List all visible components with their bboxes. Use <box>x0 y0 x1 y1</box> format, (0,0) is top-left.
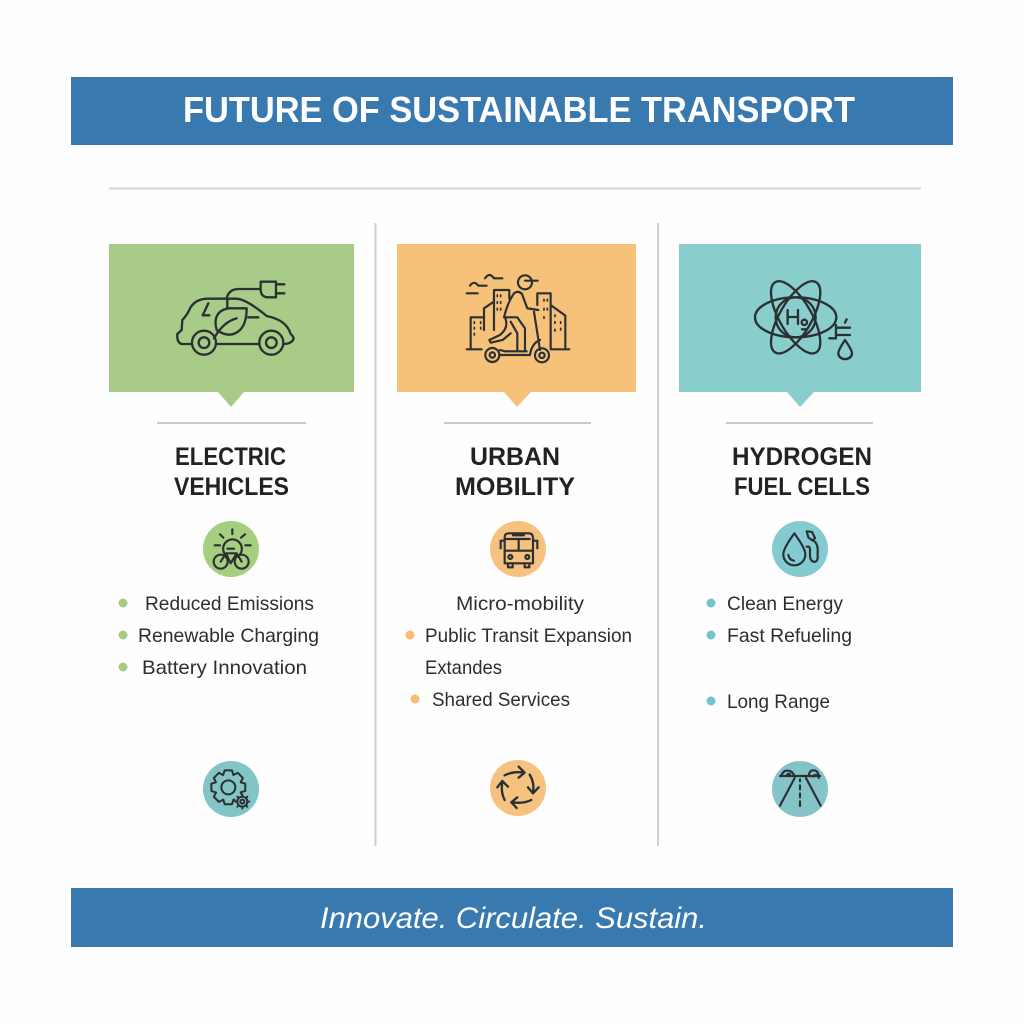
panel: urban mobility <box>397 244 636 816</box>
bullet list: electric vehicles: Battery Innovation <box>142 657 307 679</box>
bullet list: hydrogen fuel cells: Long Range <box>727 691 830 713</box>
heading: hydrogen fuel cells <box>732 443 872 501</box>
bullet list: hydrogen fuel cells <box>706 593 852 713</box>
icon: droplet and fuel nozzle <box>772 521 828 577</box>
bullet list: urban mobility: Public Transit Expansion <box>425 625 632 647</box>
heading: electric vehicles: VEHICLES <box>174 473 289 501</box>
bullet list: urban mobility: Extandes <box>425 657 502 679</box>
title banner: FUTURE OF SUSTAINABLE TRANSPORT <box>183 89 855 130</box>
orange header card <box>397 244 636 407</box>
icon: hydrogen atom with droplet <box>755 274 852 361</box>
icon: circular arrows <box>490 760 546 816</box>
panel: electric vehicles <box>109 244 354 817</box>
teal header card <box>679 244 921 407</box>
footer banner <box>71 888 953 947</box>
heading: hydrogen fuel cells: HYDROGEN <box>732 443 872 471</box>
icon: bus <box>490 521 546 577</box>
bullet list: hydrogen fuel cells: Clean Energy <box>727 593 843 615</box>
heading: urban mobility: MOBILITY <box>455 473 575 501</box>
icon: road with overpass <box>772 761 828 817</box>
title banner <box>71 77 953 145</box>
heading: urban mobility: URBAN <box>470 443 560 471</box>
icon: electric car with leaf and plug <box>177 282 293 355</box>
bullet list: urban mobility: Micro-mobility <box>456 593 584 615</box>
footer banner: Innovate. Circulate. Sustain. <box>320 902 707 935</box>
panel: hydrogen fuel cells <box>679 244 921 817</box>
heading: electric vehicles: ELECTRIC <box>175 443 286 471</box>
bullet list: urban mobility <box>406 593 632 711</box>
bullet list: urban mobility: Shared Services <box>432 689 570 711</box>
icon: gears <box>203 761 259 817</box>
bullet list: electric vehicles <box>118 593 319 679</box>
bullet list: electric vehicles: Reduced Emissions <box>145 593 314 615</box>
green header card <box>109 244 354 407</box>
heading: hydrogen fuel cells: FUEL CELLS <box>734 473 870 501</box>
icon: scooter rider in city <box>467 275 569 362</box>
bullet list: hydrogen fuel cells: Fast Refueling <box>727 625 852 647</box>
heading: electric vehicles <box>174 443 289 501</box>
icon: bicycle and light bulb <box>203 521 259 577</box>
bullet list: electric vehicles: Renewable Charging <box>138 625 319 647</box>
heading: urban mobility <box>455 443 575 501</box>
